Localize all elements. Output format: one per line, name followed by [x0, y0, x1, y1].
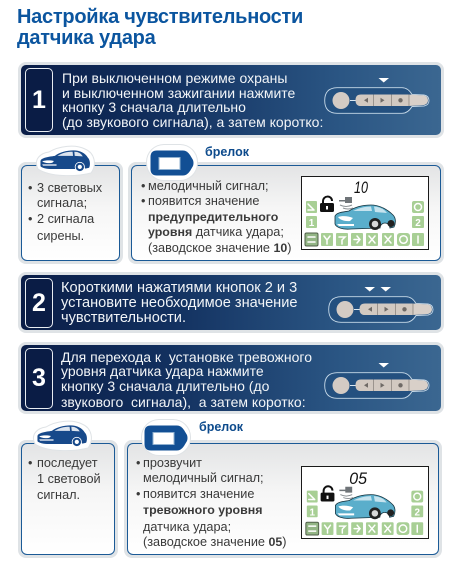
- step number 1: 1: [32, 86, 46, 114]
- LCD display showing 05: [302, 467, 428, 538]
- LCD display showing 10: [302, 177, 428, 249]
- step number 2: 2: [32, 289, 46, 317]
- step number 3: 3: [32, 364, 46, 392]
- key fob signals text: появится значение: [143, 487, 254, 501]
- car signal text: [28, 456, 101, 502]
- car signal text: сигнал.: [37, 488, 80, 502]
- icon: remote with button 3 marker: [324, 363, 430, 399]
- step 3 instruction text: кнопку 3 сначала длительно (до: [61, 378, 269, 394]
- icon: remote with button 3 marker: [324, 78, 430, 114]
- title: датчика удара: [17, 26, 155, 48]
- LCD display showing 10: 10: [354, 178, 368, 197]
- title: [17, 6, 303, 48]
- step 2 instruction text: установите необходимое значение: [61, 295, 298, 311]
- step 1 instruction text: кнопку 3 сначала длительно: [62, 99, 246, 115]
- label: key fob: брелок: [205, 145, 249, 159]
- car signals text: [28, 181, 102, 243]
- step number 2: [25, 278, 53, 328]
- panel: step 1: [18, 62, 444, 138]
- key fob signals text: уровня датчика удара;: [148, 225, 284, 239]
- panel: key fob reaction, step 1: [128, 144, 444, 264]
- key fob signals text: датчика удара;: [143, 520, 231, 534]
- car signals text: 3 световых: [37, 181, 102, 195]
- panel: step 3: [18, 342, 444, 414]
- car signals text: •: [28, 181, 32, 195]
- key fob signals text: прозвучит: [143, 456, 202, 470]
- panel: car reaction, step 1: [18, 146, 123, 264]
- key fob signals text: •: [141, 179, 145, 193]
- key fob signals text: (заводское значение 10): [148, 241, 292, 255]
- step 2 instruction text: чувствительности.: [61, 310, 186, 326]
- key fob signals text: тревожного уровня: [143, 503, 262, 517]
- icon: remote with buttons 2 and 3 markers: [328, 287, 434, 323]
- step 1 instruction text: (до звукового сигнала), а затем коротко:: [62, 114, 323, 130]
- step 2 instruction text: Короткими нажатиями кнопок 2 и 3: [61, 280, 297, 296]
- key fob signals text: мелодичный сигнал;: [148, 179, 269, 193]
- car signal text: •: [28, 456, 32, 470]
- icon: car badge: [33, 420, 92, 450]
- step 1 instruction text: При выключенном режиме охраны: [62, 70, 287, 86]
- step number 1: [25, 68, 53, 132]
- key fob signals text: [136, 456, 287, 549]
- car signals text: сигнала;: [37, 196, 87, 210]
- panel: car reaction, step 3: [18, 420, 118, 558]
- key fob signals text: появится значение: [148, 194, 259, 208]
- step 2 instruction text: [61, 280, 298, 326]
- step 3 instruction text: уровня датчика удара нажмите: [61, 363, 264, 379]
- key fob signals text: мелодичный сигнал;: [143, 471, 264, 485]
- key fob signals text: предупредительного: [148, 210, 278, 224]
- car signals text: •: [28, 212, 32, 226]
- car signals text: сирены.: [37, 229, 84, 243]
- step 3 instruction text: [61, 349, 312, 410]
- key fob signals text: •: [141, 194, 145, 208]
- key fob signals text: •: [136, 456, 140, 470]
- key fob signals text: (заводское значение 05): [143, 535, 287, 549]
- step 3 instruction text: звукового сигнала), а затем коротко:: [61, 394, 306, 410]
- panel: key fob reaction, step 3: [124, 419, 442, 558]
- car signal text: 1 световой: [37, 472, 101, 486]
- icon: key fob badge: [142, 420, 190, 455]
- step 3 instruction text: Для перехода к установке тревожного: [61, 349, 312, 365]
- car signal text: последует: [37, 456, 98, 470]
- step 1 instruction text: [62, 70, 323, 130]
- icon: car badge: [36, 146, 95, 176]
- icon: key fob badge: [147, 145, 197, 180]
- LCD display showing 05: 05: [349, 469, 368, 488]
- step 1 instruction text: и выключенном зажигании нажмите: [62, 85, 295, 101]
- label: key fob: брелок: [199, 420, 243, 434]
- key fob signals text: [141, 179, 292, 255]
- title: Настройка чувствительности: [17, 6, 303, 28]
- car signals text: 2 сигнала: [37, 212, 94, 226]
- key fob signals text: •: [136, 487, 140, 501]
- step number 3: [25, 348, 53, 409]
- panel: step 2: [18, 272, 444, 333]
